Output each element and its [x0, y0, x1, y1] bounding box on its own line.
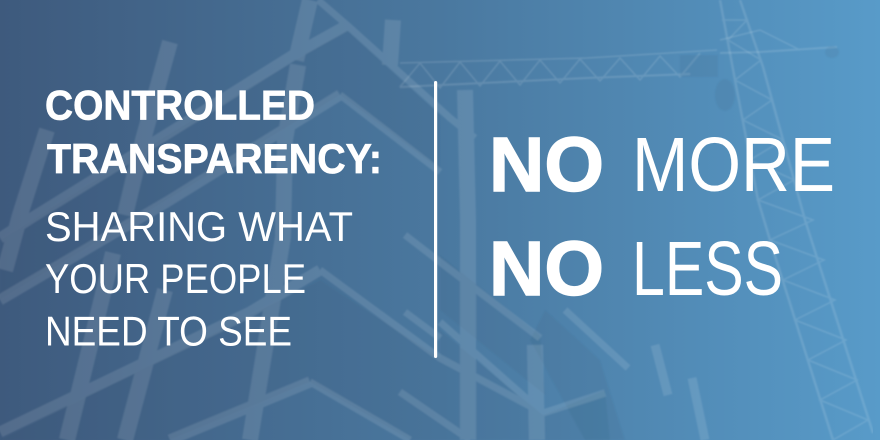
- crane mast: [720, 0, 873, 440]
- vertical divider: [434, 81, 437, 358]
- tagline: no more: NO: [489, 122, 604, 208]
- heading: controlled transparency: [45, 82, 382, 182]
- tagline: no less: LESS: [632, 226, 783, 312]
- subheading: sharing what your people need to see: [45, 203, 353, 354]
- crane dark details: [680, 46, 839, 111]
- subheading: sharing what your people need to see: SHARING WHAT: [45, 203, 353, 250]
- tagline: no less: NO: [489, 226, 604, 312]
- subheading: sharing what your people need to see: YOUR PEOPLE: [45, 255, 306, 302]
- tagline: no more: MORE: [632, 122, 835, 208]
- crane jib: [400, 30, 837, 88]
- tagline: no less: [489, 226, 783, 312]
- heading: controlled transparency: CONTROLLED: [45, 82, 315, 128]
- heading: controlled transparency: TRANSPARENCY:: [47, 135, 382, 182]
- tagline: no more: [489, 122, 835, 208]
- slab shadows: [0, 30, 625, 440]
- subheading: sharing what your people need to see: NEED TO SEE: [45, 308, 292, 354]
